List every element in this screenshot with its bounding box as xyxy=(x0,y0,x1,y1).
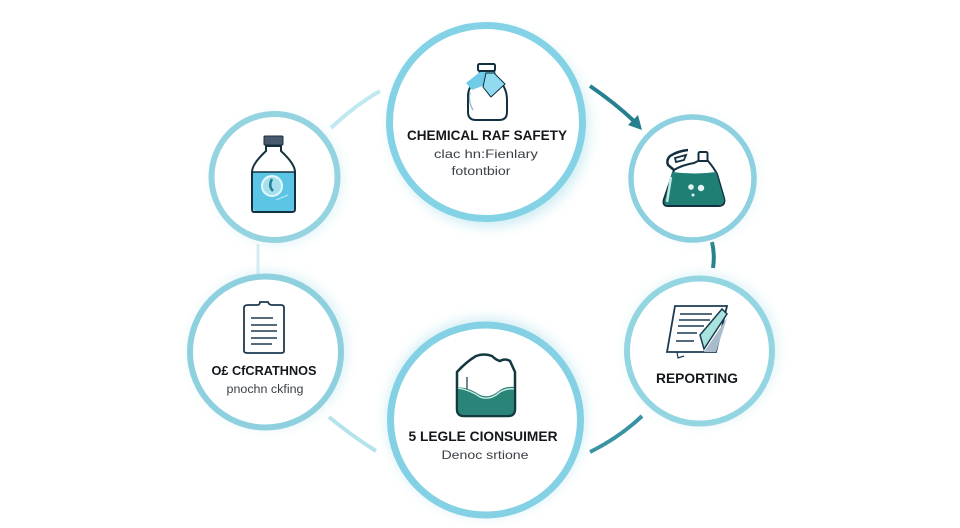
heading: consumer: 5 LEGLE CIONSUIMER xyxy=(408,428,558,444)
connector: left checklist to bottle xyxy=(256,244,260,274)
text: chemical safety description xyxy=(434,147,538,178)
icon: chemical bag bottle xyxy=(466,64,507,120)
icon: clipboard document xyxy=(244,302,284,353)
arrow: chemical safety to flask xyxy=(590,86,642,130)
text: chemical safety description: fotontbior xyxy=(452,166,511,178)
text: consumer description: Denoc srtione xyxy=(442,448,529,462)
heading: checklist: O£ CfCRATHNOS xyxy=(212,364,316,378)
panel: checklist xyxy=(190,272,347,428)
heading: reporting: REPORTING xyxy=(656,371,738,386)
icon: flask xyxy=(664,150,724,206)
heading: chemical safety: CHEMICAL RAF SAFETY xyxy=(407,128,567,143)
text: checklist description: pnochn ckfing xyxy=(226,384,304,396)
panel: consumer xyxy=(387,318,585,516)
connector: reporting to consumer xyxy=(590,416,642,452)
panel: bottle xyxy=(212,114,342,244)
connector: bottom consumer to left checklist xyxy=(329,417,376,451)
panel: reporting xyxy=(627,274,777,424)
text: chemical safety description: clac hn:Fienlary xyxy=(434,147,538,161)
panel: chemical safety xyxy=(390,26,589,227)
icon: report with pen xyxy=(667,306,727,358)
connector: bottle to chemical safety xyxy=(331,91,380,128)
icon: bottle xyxy=(252,136,295,212)
panel: flask xyxy=(631,117,757,242)
connector: flask to reporting xyxy=(712,242,714,268)
icon: filled container xyxy=(457,354,515,416)
